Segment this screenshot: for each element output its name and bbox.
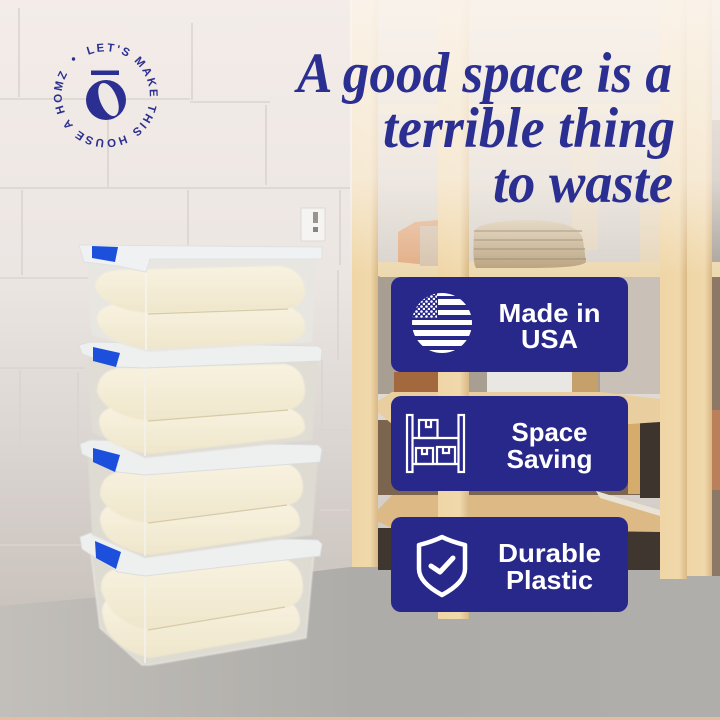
badge: Space Saving	[391, 396, 628, 491]
storage box 4 (top)	[79, 245, 322, 352]
wall outlet	[301, 208, 325, 241]
icon: US flag circle	[412, 293, 472, 354]
badge: Space Saving: Space	[512, 417, 588, 447]
badge: Made in USA: USA	[521, 324, 578, 354]
upper bay	[378, 0, 720, 264]
shelf item: jar	[398, 220, 438, 266]
posts	[352, 0, 378, 567]
shelf item: coiled rope	[473, 220, 586, 268]
title: terrible thing	[383, 97, 675, 160]
icon: shield with check	[419, 537, 465, 595]
logo: circular badge	[54, 43, 158, 148]
badge: Durable Plastic: Durable	[498, 538, 601, 568]
floor	[0, 567, 720, 720]
lower bay	[378, 420, 660, 495]
upper fade overlay	[350, 0, 720, 275]
storage box 3	[79, 342, 322, 458]
logo ring text: LET'S MAKE THIS HOUSE A HOMZ	[54, 43, 158, 148]
badge: Space Saving: Saving	[506, 444, 592, 474]
badge: Durable Plastic: Plastic	[506, 565, 593, 595]
shelves	[366, 262, 720, 277]
storage box 2	[80, 440, 322, 558]
title: A good space is a	[294, 42, 672, 105]
title: to waste	[493, 152, 673, 215]
badge: Made in USA	[391, 277, 628, 372]
icon: warehouse rack	[407, 415, 464, 472]
badge: Made in USA: Made in	[498, 298, 600, 328]
storage box 1 (bottom)	[80, 533, 322, 665]
middle bay	[378, 276, 720, 394]
shelving unit	[352, 0, 720, 619]
title	[294, 42, 675, 215]
badge: Durable Plastic	[391, 517, 628, 612]
